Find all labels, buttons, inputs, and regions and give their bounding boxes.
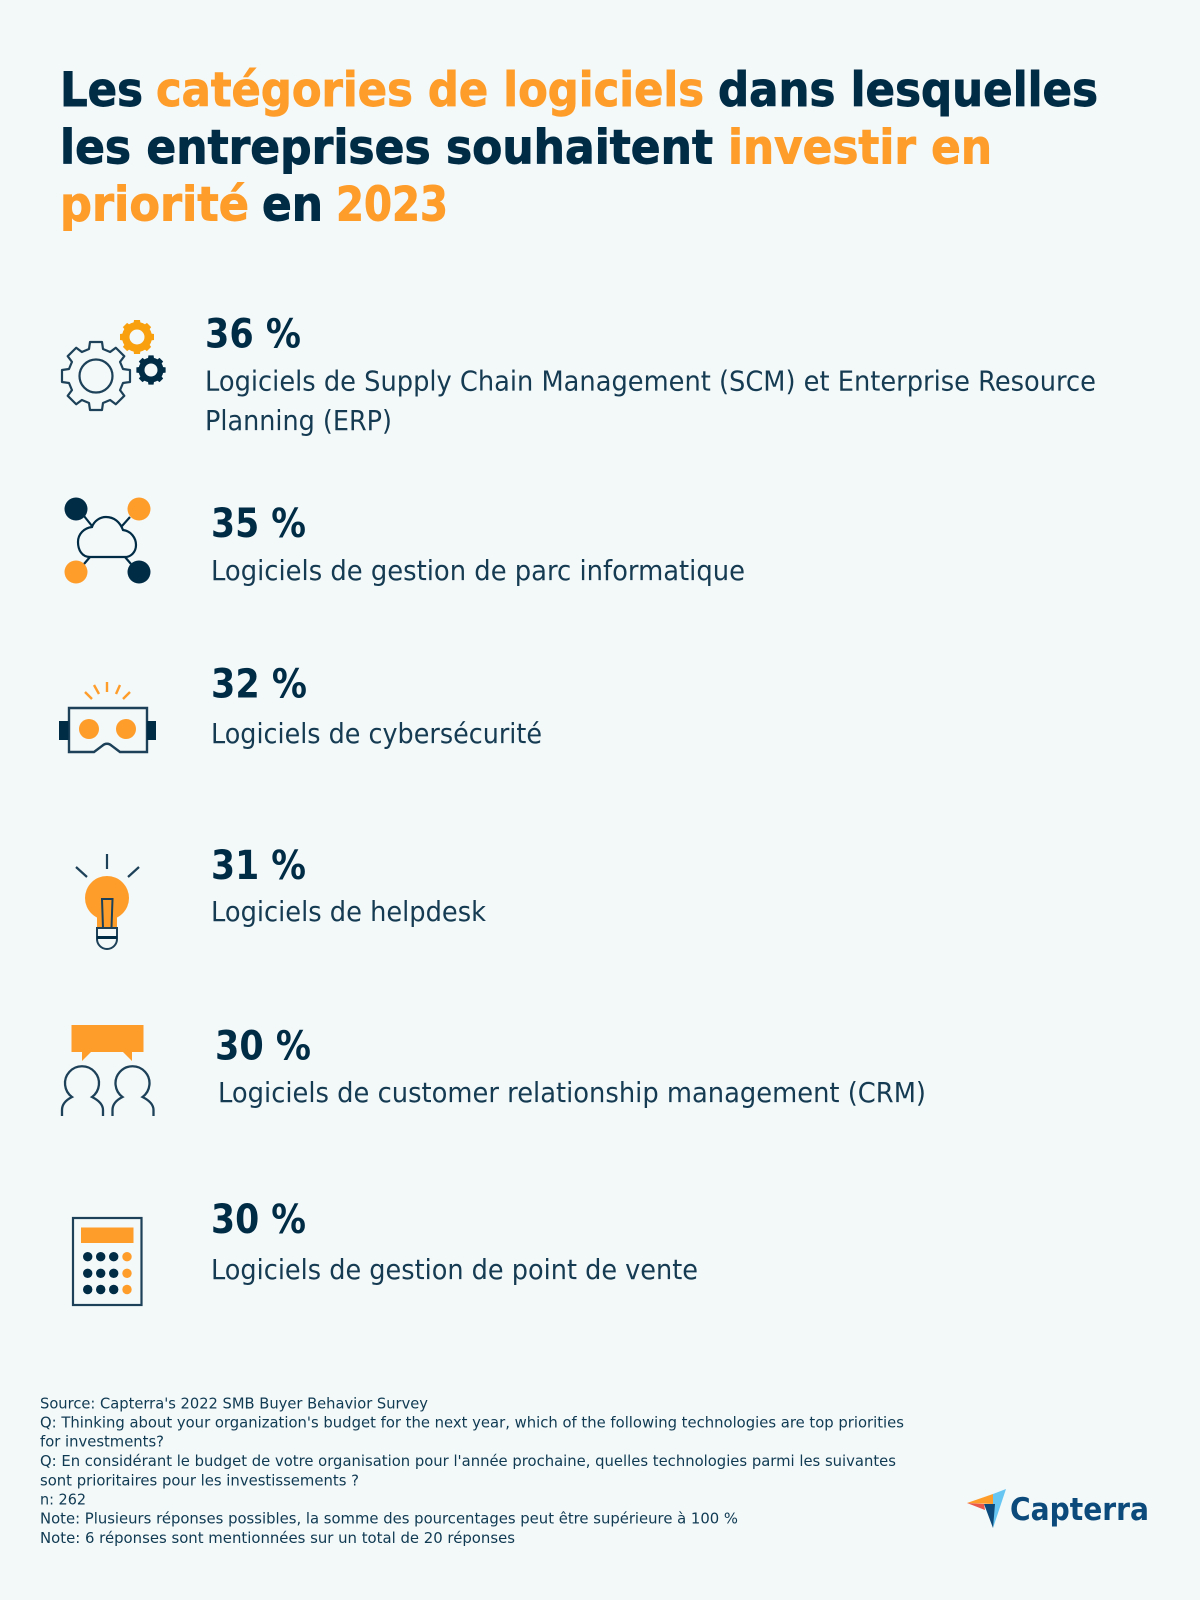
stat: 30 % CRM: 30 % xyxy=(215,1024,311,1070)
label: point de vente: Logiciels de gestion de point de vente xyxy=(211,1253,698,1286)
source notes: Note: 6 réponses sont mentionnées sur un total de 20 réponses xyxy=(40,1529,515,1547)
title: Les xyxy=(60,63,143,118)
label: cybersécurité: Logiciels de cybersécurité xyxy=(211,717,542,750)
title: investir en xyxy=(728,120,992,176)
stat: 36 %: 36 % xyxy=(205,312,301,358)
label: SCM and ERP xyxy=(205,364,1096,437)
logo: Capterra xyxy=(967,1489,1149,1528)
title xyxy=(60,63,1098,232)
source notes: for investments? xyxy=(40,1432,164,1450)
source notes: Note: Plusieurs réponses possibles, la somme des pourcentages peut être supérieure à 100 % xyxy=(40,1510,738,1528)
stat: 30 % point de vente: 30 % xyxy=(211,1197,306,1243)
icon: people with speech bubble xyxy=(62,1025,154,1116)
label: CRM: Logiciels de customer relationship management (CRM) xyxy=(218,1076,926,1109)
label: helpdesk: Logiciels de helpdesk xyxy=(211,895,487,928)
title: priorité xyxy=(60,178,249,232)
title: 2023 xyxy=(336,178,448,232)
label: SCM and ERP: Planning (ERP) xyxy=(205,404,392,437)
source notes xyxy=(40,1394,904,1547)
source notes: n: 262 xyxy=(40,1490,86,1508)
label: parc informatique: Logiciels de gestion de parc informatique xyxy=(211,554,745,587)
stat: 35 %: 35 % xyxy=(211,501,306,547)
source notes: Q: Thinking about your organization's budget for the next year, which of the following technologies are top priorities xyxy=(40,1414,904,1432)
stat: 31 %: 31 % xyxy=(211,843,306,889)
title: dans lesquelles xyxy=(718,63,1098,118)
title: les entreprises souhaitent xyxy=(60,120,713,176)
title: catégories de logiciels xyxy=(156,63,704,118)
icon: calculator xyxy=(73,1218,142,1305)
title: en xyxy=(262,178,323,232)
icon: VR headset xyxy=(59,682,156,752)
source notes: sont prioritaires pour les investissements ? xyxy=(40,1472,359,1490)
icon: light bulb xyxy=(76,854,139,949)
stat: 32 %: 32 % xyxy=(211,662,307,708)
logo: Capterra: Capterra xyxy=(1010,1492,1149,1528)
source notes: Source: Capterra's 2022 SMB Buyer Behavior Survey xyxy=(40,1394,428,1412)
source notes: Q: En considérant le budget de votre organisation pour l'année prochaine, quelles technologies parmi les suivantes xyxy=(40,1452,896,1470)
label: SCM and ERP: Logiciels de Supply Chain Management (SCM) et Enterprise Resource xyxy=(205,364,1096,398)
icon: gears xyxy=(62,320,166,410)
icon: cloud network xyxy=(64,498,150,584)
